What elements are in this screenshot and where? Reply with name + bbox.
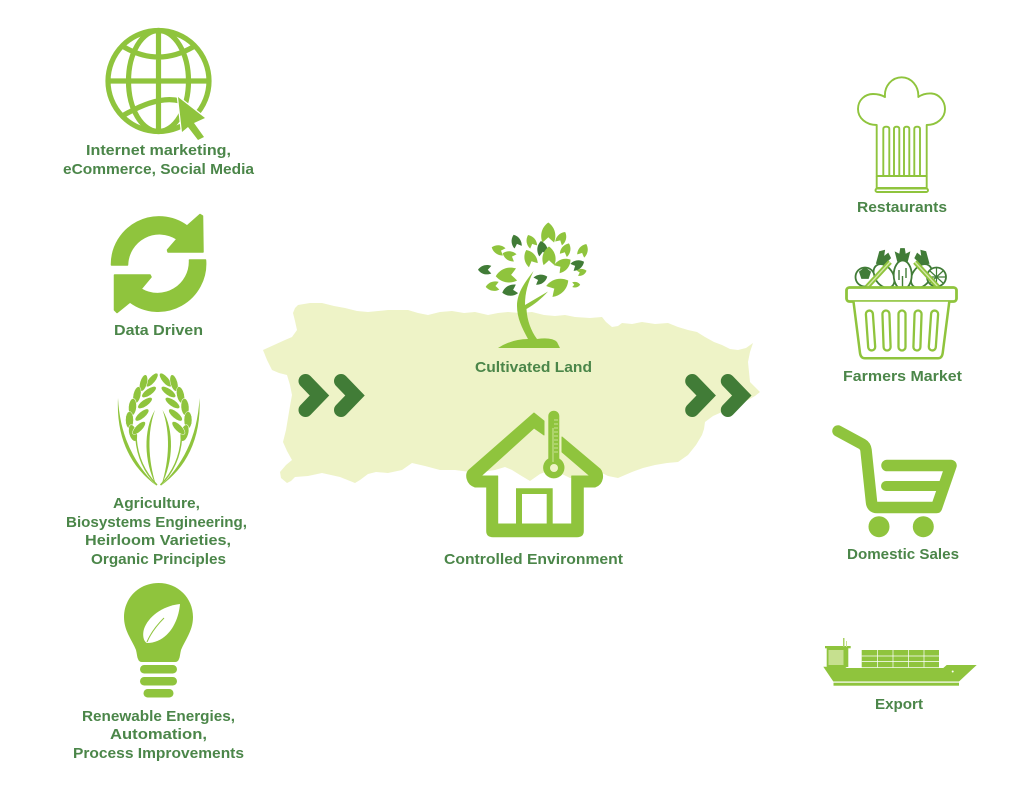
icon: refresh arrows bbox=[111, 214, 206, 312]
thermometer bbox=[543, 411, 564, 478]
icon: light bulb with leaf bbox=[124, 583, 193, 698]
cart frame bbox=[838, 431, 951, 508]
basket handles bbox=[867, 262, 938, 287]
icon: shopping cart bbox=[838, 431, 951, 537]
controlled environment label: Controlled Environment bbox=[444, 551, 623, 568]
icon: tree bbox=[478, 222, 591, 348]
right double chevron arrow bbox=[692, 381, 742, 410]
domestic sales label: Domestic Sales bbox=[847, 546, 959, 563]
icon: container ship bbox=[823, 638, 977, 686]
tree leaves bbox=[478, 222, 591, 298]
door bbox=[516, 488, 553, 524]
ship hull bbox=[823, 665, 977, 682]
globe bbox=[108, 30, 209, 132]
right wheat blades bbox=[160, 398, 200, 486]
hat top and body bbox=[858, 77, 945, 176]
leaf bbox=[143, 604, 180, 643]
basket body bbox=[854, 302, 949, 358]
map of the island bbox=[263, 303, 760, 483]
internet marketing label bbox=[63, 142, 255, 178]
data driven label: Data Driven bbox=[114, 322, 203, 339]
right wheat stem bbox=[160, 438, 182, 485]
icon: wheat bbox=[118, 371, 200, 486]
left ear of wheat bbox=[126, 371, 160, 442]
hat pleats bbox=[883, 127, 920, 176]
renewable energies label: Process Improvements bbox=[73, 745, 244, 762]
restaurants label: Restaurants bbox=[857, 199, 947, 216]
cultivated land label: Cultivated Land bbox=[475, 359, 592, 376]
renewable energies label bbox=[73, 708, 244, 762]
agriculture label: Heirloom Varieties, bbox=[85, 532, 231, 549]
renewable energies label: Renewable Energies, bbox=[82, 708, 235, 725]
icon: house with thermometer bbox=[467, 411, 603, 537]
hull stripe bbox=[834, 683, 959, 686]
house outline bbox=[467, 413, 603, 537]
icon: chef hat bbox=[858, 77, 945, 192]
leaf vein bbox=[147, 618, 164, 642]
agriculture label: Agriculture, bbox=[113, 495, 200, 512]
basket rim bbox=[846, 288, 956, 302]
thermometer bulb centre bbox=[550, 464, 558, 472]
vegetables bbox=[856, 249, 946, 292]
containers bbox=[862, 650, 939, 667]
basket slots bbox=[866, 310, 938, 351]
bulb body bbox=[124, 583, 193, 662]
left wheat blades bbox=[118, 398, 157, 486]
renewable energies label: Automation, bbox=[110, 726, 207, 743]
internet marketing label: Internet marketing, bbox=[86, 142, 231, 159]
thermometer tube bbox=[543, 411, 564, 478]
cart wheels bbox=[868, 516, 934, 537]
export label: Export bbox=[875, 696, 923, 713]
right ear of wheat bbox=[158, 371, 192, 442]
ship bridge bbox=[825, 638, 851, 667]
icon: vegetable basket bbox=[846, 249, 956, 358]
cart middle bar bbox=[886, 481, 943, 491]
agriculture label: Organic Principles bbox=[91, 551, 226, 568]
left wheat stem bbox=[136, 438, 157, 485]
porthole bbox=[952, 670, 954, 672]
tree trunk and mound bbox=[498, 271, 560, 348]
left double chevron arrow bbox=[306, 381, 355, 410]
hat band bbox=[877, 176, 927, 188]
agriculture label bbox=[66, 495, 247, 568]
cursor arrow bbox=[178, 97, 205, 140]
agriculture label: Biosystems Engineering, bbox=[66, 514, 247, 531]
globe with cursor icon bbox=[108, 30, 209, 140]
internet marketing label: eCommerce, Social Media bbox=[63, 161, 255, 178]
farmers market label: Farmers Market bbox=[843, 368, 962, 385]
thermometer scale bbox=[553, 420, 558, 462]
bulb base bars bbox=[140, 665, 177, 698]
hat base bbox=[876, 188, 928, 192]
